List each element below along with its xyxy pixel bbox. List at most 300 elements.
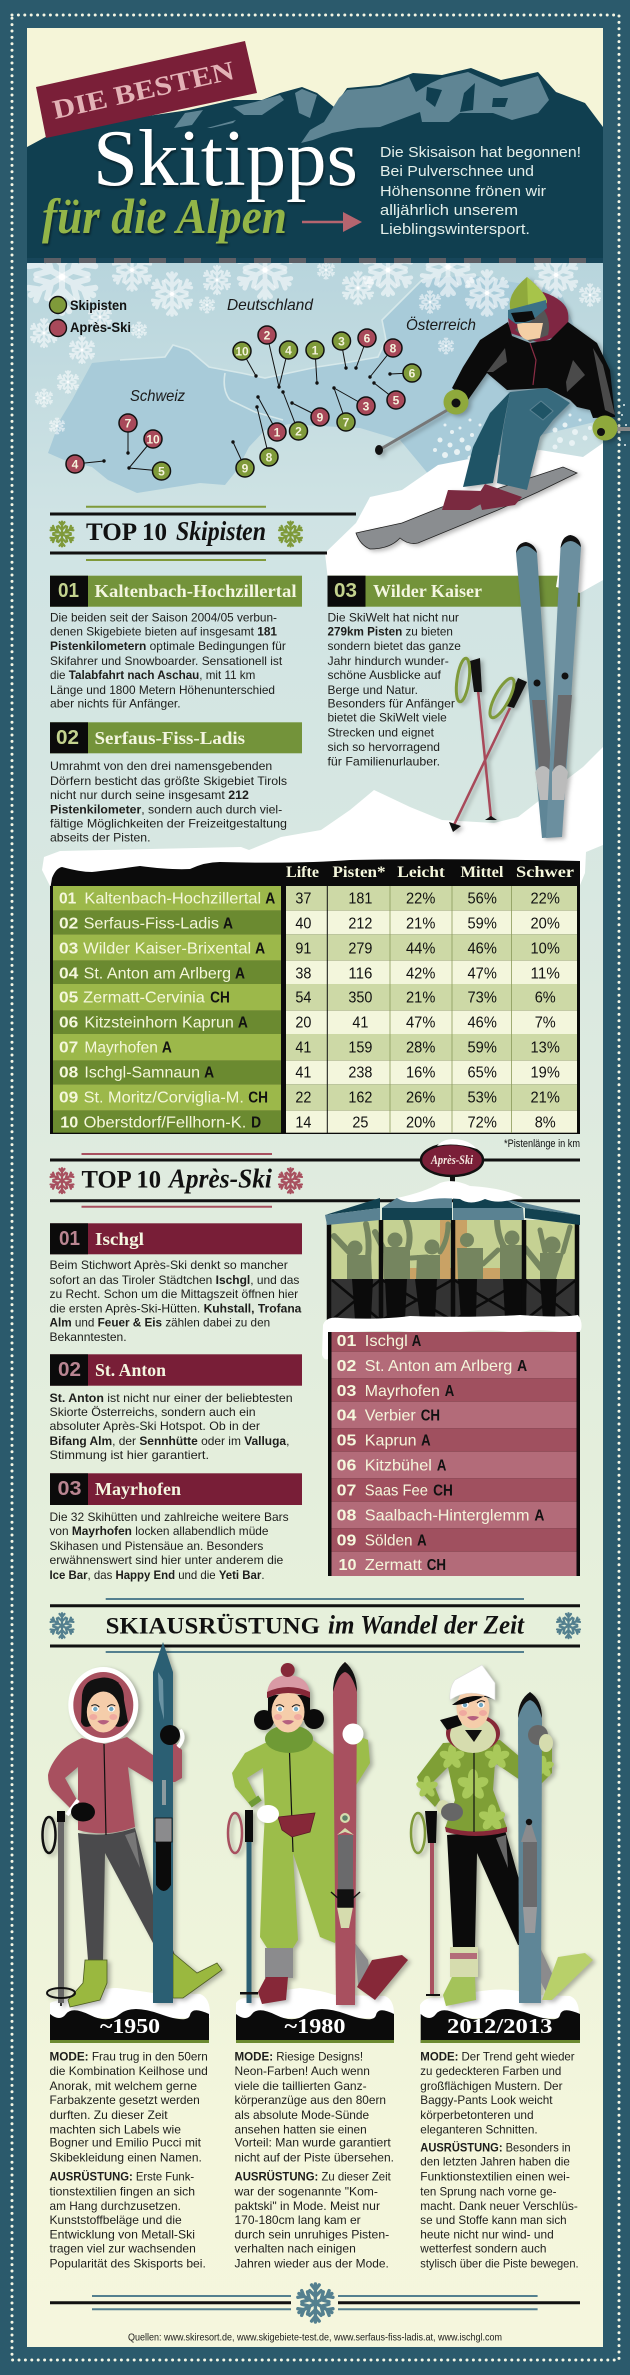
list text: 07 (337, 1483, 357, 1500)
table: resort names: Mayrhofen (84, 1040, 158, 1057)
table: Pisten values: 212 (348, 915, 372, 932)
map marker numbers: Après-Ski: 10 (146, 432, 160, 446)
table: Pisten values: 41 (352, 1015, 368, 1032)
list text: A (445, 1383, 455, 1400)
text column 2012/2013: MODE: Der Trend geht wieder (420, 2050, 575, 2064)
text: St. Anton: Bifang Alm, der Sennhütte oder im Valluga, (50, 1434, 289, 1448)
map marker numbers: Skipisten: 4 (285, 344, 292, 358)
gloves (67, 1725, 183, 1822)
map marker numbers: Skipisten: 8 (266, 450, 273, 464)
table: Pisten values: 279 (348, 940, 372, 957)
hut: lower wall (329, 1279, 578, 1320)
table: resort names: Ischgl-Samnaun (84, 1064, 200, 1081)
list rows (332, 1332, 576, 1576)
table: Leicht values: 42% (406, 965, 435, 982)
text column 1980: 170-180cm lang kam er (234, 2213, 361, 2227)
table: Schwer values: 19% (531, 1064, 560, 1081)
text: Wilder Kaiser: sich so hervorragend (328, 740, 440, 754)
table: Pisten values: 159 (348, 1040, 372, 1057)
text: Kaltenbach: denen Skigebiete bieten auf insgesamt 181 (50, 625, 277, 639)
list text: Sölden (365, 1533, 413, 1550)
table: Lifte values: 54 (295, 990, 311, 1007)
heading: Skiausrüstung im Wandel der Zeit: SKIAUSRÜSTUNG (106, 1613, 320, 1638)
table: resort names: St. Moritz/Corviglia-M. (84, 1089, 244, 1106)
box 03 Wilder Kaiser: Wilder Kaiser (373, 581, 482, 601)
text: Serfaus (50, 759, 287, 845)
map labels: Schweiz (130, 388, 185, 405)
text: Ischgl: Beim Stichwort Après-Ski denkt so mancher (50, 1258, 288, 1272)
table: resort names: CH (210, 990, 230, 1007)
beanie (450, 1665, 495, 1700)
text: St. Anton: Stimmung ist hier garantiert. (50, 1448, 209, 1462)
text column 2012/2013: Funktionstextilien einen wei- (420, 2170, 570, 2184)
icon: snowflake right (556, 1613, 581, 1638)
table: Schwer values (531, 890, 560, 1131)
list text: 05 (337, 1433, 357, 1450)
box 01 Kaltenbach (50, 576, 302, 607)
text: Kaltenbach: aber nichts für Anfänger. (50, 697, 181, 711)
intro text: Bei Pulverschnee und (380, 163, 534, 180)
map marker numbers: Après-Ski (72, 328, 400, 472)
header: mountains (27, 68, 603, 258)
text column 1950 (50, 2050, 208, 2271)
table: resort names: 01 (59, 890, 76, 907)
text: St. Anton: absoluter Après-Ski Hotspot. Ob in der (50, 1419, 260, 1433)
box 03 Wilder Kaiser (328, 576, 580, 607)
text: Serfaus: Dörfern besticht das größte Skigebiet Tirols (50, 774, 287, 788)
box St. Anton: 02 (58, 1359, 81, 1381)
table: Pisten values: 238 (348, 1064, 372, 1081)
hat (267, 1663, 310, 1698)
era label ~1980: ~1980 (284, 2014, 346, 2038)
map marker numbers: Après-Ski: 9 (317, 410, 324, 424)
skier: gloves (444, 390, 618, 440)
text column 1980 (233, 2050, 394, 2271)
text column 1950: Entwicklung von Metall-Ski (50, 2227, 195, 2241)
table: Mittel values: 47% (468, 965, 497, 982)
snow mound 1950 (50, 1988, 210, 2018)
ski 1 (516, 542, 556, 838)
text: St. Anton: St. Anton ist nicht nur einer der beliebtesten (50, 1391, 293, 1405)
text column 1950: Popularität des Skisports bei. (50, 2257, 206, 2271)
pole (228, 1810, 258, 2003)
table: resort names: Serfaus-Fiss-Ladis (84, 915, 219, 932)
table: Schwer values: 8% (535, 1114, 556, 1131)
text: Serfaus: nicht nur durch seine insgesamt 212 (50, 788, 249, 802)
map marker numbers: Après-Ski: 3 (363, 400, 370, 414)
list text: 10 (338, 1557, 357, 1574)
text column 1950: Anorak, mit welchem gerne (50, 2079, 197, 2093)
table: resort names: 04 (59, 965, 78, 982)
intro text: Die Skisaison hat begonnen! (380, 144, 581, 161)
list text: 02 (337, 1358, 357, 1375)
map legend (50, 296, 131, 336)
era label 2012/2013 (421, 2009, 580, 2043)
list text: A (417, 1533, 427, 1550)
text: Mayrhofen: von Mayrhofen locken allabendlich müde (50, 1524, 269, 1538)
list text: A (517, 1358, 527, 1375)
box Ischgl (50, 1223, 302, 1254)
table: Leicht values: 26% (406, 1089, 435, 1106)
hut: window background (329, 1220, 578, 1279)
text: Wilder Kaiser (328, 611, 461, 769)
table: Mittel values (468, 890, 497, 1131)
table: resort names: A (204, 1064, 214, 1081)
ski (153, 1642, 173, 2003)
hut illustration (322, 1181, 582, 1359)
cream sky panel (27, 28, 603, 158)
text column 1950: durften. Zu dieser Zeit (50, 2108, 168, 2122)
banner: DIE BESTEN: DIE BESTEN (50, 55, 237, 125)
icon: snowflake left (49, 1168, 75, 1193)
table: Mittel values: 72% (468, 1114, 497, 1131)
table: resort names: 09 (59, 1089, 78, 1106)
text column 1950: MODE: Frau trug in den 50ern (50, 2050, 208, 2064)
list text: A (412, 1333, 422, 1350)
box 02 Serfaus (50, 722, 302, 753)
table: resort names: A (238, 1015, 248, 1032)
text column 2012/2013: heute nicht nur wind- und (420, 2227, 554, 2241)
table: Pisten values: 25 (352, 1114, 368, 1131)
text column 2012/2013: eleganteren Schnitten. (420, 2122, 538, 2136)
table: resort names: 03 (59, 940, 78, 957)
map marker numbers: Après-Ski: 5 (393, 394, 400, 408)
text column 1980: AUSRÜSTUNG: Zu dieser Zeit (234, 2169, 391, 2184)
text: Wilder Kaiser: für Familienurlauber. (328, 755, 440, 769)
list text: Mayrhofen (365, 1383, 440, 1400)
text: Ischgl: Alm und Feuer & Eis zählen dabei zu den (50, 1316, 270, 1330)
text column 2012/2013: zu gedeckteren Farben und (420, 2064, 561, 2078)
table: resort names: 10 (60, 1114, 78, 1131)
sign: Après-Ski: Après-Ski (430, 1152, 473, 1167)
map marker numbers: Après-Ski: 6 (364, 332, 371, 346)
text: Wilder Kaiser: bietet die SkiWelt viele (328, 711, 447, 725)
table: Leicht values: 28% (406, 1040, 435, 1057)
map markers: Skipisten (152, 332, 421, 480)
text: Wilder Kaiser: 279km Pisten zu bieten (328, 625, 453, 639)
sources: Quellen: www.skiresort.de, www.skigebiete-test.de, www.serfaus-fiss-ladis.at, www.ischgl.com (128, 2332, 502, 2344)
table: Pisten values: 162 (348, 1089, 372, 1106)
table: Schwer values: 13% (531, 1040, 560, 1057)
fanny pack (278, 1813, 315, 1837)
text column 2012/2013: ten Sprung nach vorne ge- (420, 2185, 556, 2199)
text: Ischgl: zu Recht. Schon um die Mittagszeit öffnen hier (50, 1287, 298, 1301)
map legend: Skipisten (70, 297, 127, 313)
text column 1980: Jahren wieder aus der Mode. (234, 2257, 389, 2271)
snowflakes over map (27, 263, 601, 434)
table: resort names: Kitzsteinhorn Kaprun (84, 1015, 234, 1032)
list text (337, 1333, 545, 1574)
text: Kaltenbach: Länge und 1800 Metern Höhenunterschied (50, 683, 275, 697)
table: resort names: A (265, 890, 276, 907)
table: Pisten values: 116 (348, 965, 372, 982)
snow mound 1980 (236, 1988, 394, 2018)
hut: pillars (329, 1220, 577, 1320)
text column 1950: AUSRÜSTUNG: Erste Funk- (50, 2169, 194, 2184)
table: Mittel values: 65% (468, 1064, 497, 1081)
table: Leicht values: 20% (406, 1114, 435, 1131)
text column 1950: machten sich Labels wie (50, 2122, 181, 2136)
intro text: Lieblingswintersport. (380, 221, 530, 238)
hut: roof snow (397, 1181, 523, 1202)
table: Schwer values: 10% (531, 940, 560, 957)
map marker numbers: Skipisten (158, 334, 416, 478)
table: Schwer values: 6% (535, 990, 556, 1007)
text: Mayrhofen: Skihasen und Pistensäue an. Besonders (50, 1539, 263, 1553)
text: Kaltenbach: Pistenkilometern optimale Bedingungen für (50, 639, 286, 653)
text column 2012/2013: körperbetonteren und (420, 2108, 534, 2122)
skier: jacket (452, 322, 615, 418)
hair and head (440, 1688, 495, 1730)
table: resort names: St. Anton am Arlberg (84, 965, 231, 982)
text column 1950: Farbakzente gesetzt werden (50, 2093, 200, 2107)
era label 2012/2013: 2012/2013 (447, 2014, 552, 2038)
text column 1950: Kunststoffbeläge und die (50, 2213, 182, 2227)
table: Lifte values: 22 (295, 1089, 311, 1106)
text: Serfaus: Pistenkilometer, sondern auch durch viel- (50, 802, 282, 816)
box Mayrhofen: Mayrhofen (95, 1479, 181, 1499)
list text: Ischgl (365, 1333, 408, 1350)
hut: dancing people (334, 1220, 570, 1279)
table: resort names: A (223, 915, 233, 932)
arrow (302, 212, 362, 232)
table: Leicht values: 21% (406, 915, 435, 932)
boots (68, 1953, 222, 2007)
box 02 Serfaus: Serfaus-Fiss-Ladis (94, 728, 245, 748)
table: Schwer values: 20% (531, 915, 560, 932)
sign: Après-Ski (421, 1139, 483, 1184)
list text: A (437, 1458, 447, 1475)
skier: goggles (508, 300, 547, 324)
box 01 Kaltenbach: 01 (58, 580, 79, 602)
table: Lifte values: 38 (295, 965, 311, 982)
table: resort names: Oberstdorf/Fellhorn-K. (84, 1114, 246, 1131)
table: Lifte values: 41 (295, 1064, 311, 1081)
box Ischgl: Ischgl (95, 1229, 144, 1249)
table: Leicht values: 47% (406, 1015, 435, 1032)
table: resort names: 08 (59, 1064, 78, 1081)
table: Lifte values: 20 (295, 1015, 311, 1032)
text: Kaltenbach: Skifahrer und Snowboarder. Sensationell ist (50, 654, 283, 668)
table: Lifte values: 40 (295, 915, 311, 932)
text column 2012/2013: stylisch über die Piste bewegen. (420, 2257, 579, 2271)
hut: base snow (322, 1315, 582, 1359)
gloves (437, 1725, 553, 1821)
map markers: Après-Ski (66, 326, 405, 473)
box St. Anton: St. Anton (95, 1360, 166, 1380)
text column 1980: Vorteil: Man wurde garantiert (234, 2136, 391, 2150)
text column 1950: Skibekleidung einen Namen. (50, 2151, 202, 2165)
icon: snowflake right (278, 1168, 303, 1193)
ski (518, 1692, 542, 2003)
text column 1980: nicht auf der Piste übersehen. (234, 2151, 394, 2165)
table: column headers: Leicht (397, 864, 445, 881)
figure: skier 1950 (42, 1642, 222, 2007)
table: resort names: A (255, 940, 265, 957)
table footnote: *Pistenlänge in km (504, 1138, 580, 1150)
table: column headers: Mittel (460, 864, 504, 881)
text column 2012/2013: se und Stoffe kann man sich (420, 2213, 567, 2227)
list text: Kitzbühel (365, 1458, 432, 1475)
table: resort names: 07 (59, 1040, 78, 1057)
list text: 01 (337, 1333, 357, 1350)
table: resort names: CH (248, 1089, 268, 1106)
map marker numbers: Skipisten: 7 (343, 416, 350, 430)
hood and head (68, 1667, 138, 1743)
text column 1950: tionstextilien fingen an sich (50, 2185, 195, 2199)
table: Mittel values: 46% (468, 940, 497, 957)
text column 1950: tragen viel zur wachsenden (50, 2242, 196, 2256)
heading: TOP 10 Skipisten (49, 507, 356, 560)
snow slope (325, 443, 603, 593)
text column 1980: MODE: Riesige Designs! (234, 2050, 363, 2064)
list text: 06 (337, 1458, 357, 1475)
list text: Verbier (365, 1408, 416, 1425)
table: resort names: 06 (59, 1015, 78, 1032)
text column 2012/2013 (419, 2050, 579, 2271)
text: Mayrhofen: erwähnenswert sind hier unter anderem die (50, 1553, 284, 1567)
list text: Saas Fee (365, 1483, 428, 1500)
icon: snowflake left (49, 1613, 75, 1638)
table: Lifte values: 91 (295, 940, 311, 957)
table: Pisten values: 181 (348, 890, 372, 907)
text column 2012/2013: großflächigen Mustern. Der (420, 2079, 562, 2093)
table: column headers: Schwer (516, 864, 574, 881)
table: Lifte values (295, 890, 311, 1131)
snow mound 2012/2013 (420, 1990, 579, 2018)
table: Mittel values: 53% (468, 1089, 497, 1106)
map marker numbers: Après-Ski: 8 (390, 342, 397, 356)
table: resort names: A (235, 965, 245, 982)
text: Wilder Kaiser: schöne Ausblicke auf (328, 668, 441, 682)
skier: trousers (497, 388, 570, 490)
skier: skis (356, 467, 577, 549)
jacket flowers (415, 1744, 555, 1832)
table: Pisten values: 350 (348, 990, 372, 1007)
pole (42, 1811, 75, 2006)
map legend: Après-Ski (70, 319, 131, 335)
map labels (130, 297, 476, 405)
map labels: Deutschland (227, 297, 314, 314)
text column 2012/2013: Baggy-Pants Look weicht (420, 2093, 553, 2107)
map marker numbers: Skipisten: 6 (409, 366, 416, 380)
heading: TOP 10 Après-Ski: TOP 10 (82, 1167, 161, 1194)
text: Wilder Kaiser: Strecken und eignet (328, 726, 435, 740)
table: resort names: A (162, 1040, 172, 1057)
era label ~1950: ~1950 (100, 2014, 160, 2038)
icon: snowflake left (49, 522, 75, 546)
jacket (415, 1737, 555, 1836)
figure: skier 2012/2013 (411, 1665, 593, 2006)
table: Mittel values: 46% (468, 1015, 497, 1032)
ski 2 (546, 535, 581, 838)
text: Serfaus: Umrahmt von den drei namensgebenden (50, 759, 272, 773)
text: Ischgl: sofort an das Tiroler Städtchen Ischgl, und das (50, 1273, 299, 1287)
text column 1980: durch sein unruhiges Pisten- (234, 2227, 389, 2241)
hut: people legs (352, 1279, 557, 1320)
map marker numbers: Après-Ski: 4 (72, 458, 79, 472)
jacket (48, 1737, 182, 1835)
text: Serfaus: abseits der Pisten. (50, 831, 150, 845)
icon: snowflake right (278, 522, 303, 546)
list text: A (421, 1433, 431, 1450)
Après-Ski list (328, 1332, 580, 1576)
heading: TOP 10 Après-Ski: Après-Ski (167, 1164, 272, 1194)
text: Kaltenbach: Die beiden seit der Saison 2004/05 verbun- (50, 611, 277, 625)
table: frame (50, 886, 580, 1134)
banner: DIE BESTEN (36, 41, 257, 138)
era label ~1980 (236, 2009, 394, 2043)
heading: TOP 10 Skipisten: TOP 10 (86, 519, 167, 546)
table: resort names: D (251, 1114, 261, 1131)
text: Wilder Kaiser: Berge und Natur. (328, 683, 418, 697)
text: St. Anton: Skiorte Österreichs, sondern auch ein (50, 1405, 256, 1419)
table: resort names (59, 890, 276, 1131)
footer divider with snowflake (50, 2284, 580, 2322)
text column 1980: verhalten nach einigen (234, 2242, 356, 2256)
map marker numbers: Skipisten: 9 (242, 462, 249, 476)
text column 1980: ansehen hatten sie einen (234, 2122, 367, 2136)
text column 2012/2013: den letzten Jahren haben die (420, 2155, 570, 2169)
table: Leicht values: 22% (406, 890, 435, 907)
gloves (250, 1724, 364, 1823)
trousers (78, 1828, 175, 1960)
table: column headers: Lifte (286, 864, 319, 881)
pole 1 (454, 657, 497, 820)
list text: 09 (337, 1533, 357, 1550)
table: top snow-capped header (50, 859, 580, 890)
text: Ischgl: die ersten Après-Ski-Hütten. Kuhstall, Trofana (50, 1302, 302, 1316)
heading: Skiausrüstung im Wandel der Zeit (49, 1599, 581, 1652)
table: Schwer values: 11% (531, 965, 560, 982)
skier: pole (375, 405, 630, 455)
list text: 08 (337, 1508, 357, 1525)
map marker numbers: Après-Ski: 2 (264, 328, 271, 342)
text column 2012/2013: macht. Dank neuer Verschlüs- (420, 2199, 578, 2213)
text: St. Anton (50, 1391, 293, 1462)
snow overlap on box 03 (556, 574, 603, 593)
pole 2 (449, 675, 527, 832)
table: value cells (286, 886, 577, 1133)
text column 2012/2013: AUSRÜSTUNG: Besonders in (420, 2140, 571, 2155)
table: Mittel values: 56% (468, 890, 497, 907)
table: Lifte values: 41 (295, 1040, 311, 1057)
table: Leicht values: 44% (406, 940, 435, 957)
text column 1980: paktski" in Mode. Meist nur (234, 2199, 380, 2213)
table: Mittel values: 59% (468, 1040, 497, 1057)
skier: boots (442, 484, 522, 510)
text: Mayrhofen: Die 32 Skihütten und zahlreiche weitere Bars (50, 1510, 289, 1524)
box St. Anton (50, 1354, 302, 1386)
text: Kaltenbach: die Talabfahrt nach Aschau, mit 11 km (50, 668, 255, 682)
list text: CH (427, 1557, 446, 1574)
list text: CH (433, 1483, 453, 1500)
table: resort names: Wilder Kaiser-Brixental (83, 940, 251, 957)
map marker numbers: Skipisten: 3 (338, 334, 345, 348)
map marker numbers: Skipisten: 2 (295, 424, 302, 438)
box 02 Serfaus: 02 (56, 727, 79, 749)
skis and poles illustration (449, 535, 581, 838)
table: column headers (286, 864, 574, 881)
heading: Skiausrüstung im Wandel der Zeit: im Wandel der Zeit (328, 1610, 525, 1639)
snow hill above table (42, 747, 603, 890)
table: resort names: Zermatt-Cervinia (83, 990, 205, 1007)
map marker numbers: Après-Ski: 7 (125, 416, 132, 430)
text column 2012/2013: wetterfest sondern auch (419, 2242, 546, 2256)
hair, collar and head (254, 1692, 324, 1753)
list text: A (534, 1508, 545, 1525)
text column 1950: die Kombination Keilhose und (50, 2064, 208, 2078)
